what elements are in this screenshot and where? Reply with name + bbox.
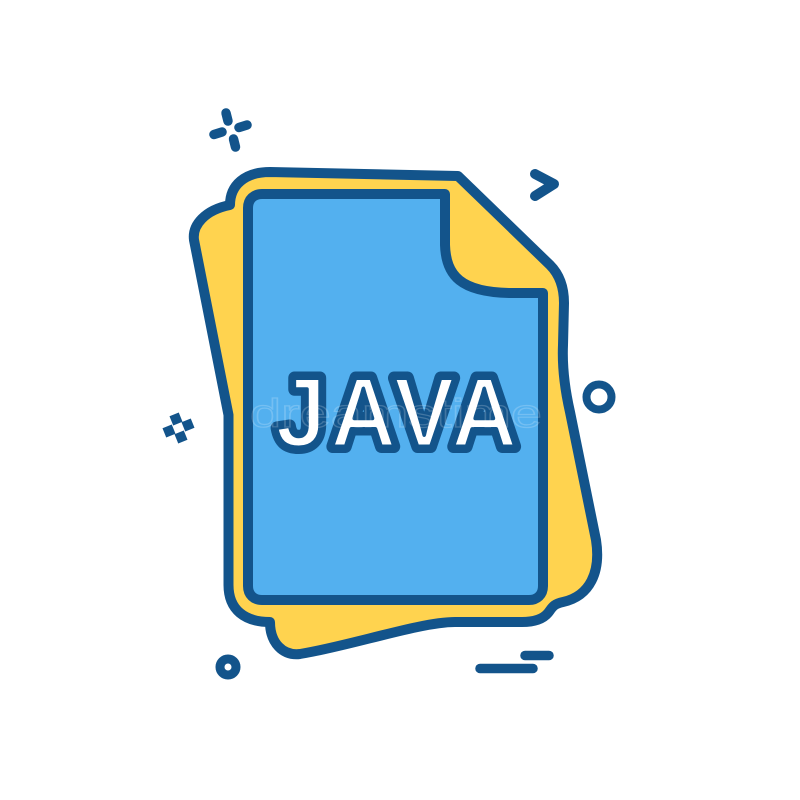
label: JAVA: JAVA bbox=[275, 357, 518, 468]
icon: four-petal sparkle bbox=[214, 113, 247, 147]
icon: speed dashes bbox=[480, 656, 549, 668]
icon: bottom-left ring bbox=[220, 659, 236, 675]
icon: right ring bbox=[586, 384, 612, 410]
icon: chevron bbox=[535, 174, 554, 196]
icon: checker diamonds bbox=[162, 412, 195, 444]
label: JAVA: JAVA bbox=[275, 357, 518, 468]
back sheet: yellow document with outline bbox=[194, 172, 597, 654]
watermark: dreamstime bbox=[250, 392, 542, 436]
front sheet: blue document with folded corner bbox=[248, 194, 543, 600]
